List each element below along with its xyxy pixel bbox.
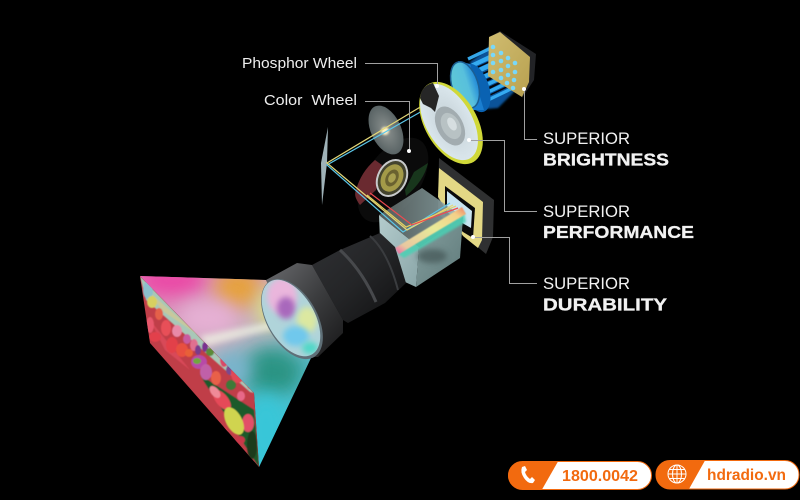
website badge	[656, 460, 799, 489]
folding mirror	[321, 127, 328, 205]
label: Phosphor Wheel: Phosphor Wheel	[242, 56, 357, 72]
color wheel	[343, 125, 443, 235]
lens glass	[261, 279, 323, 360]
projection screen with tulip photo	[140, 276, 259, 467]
callout: superior durability	[543, 274, 667, 314]
website badge: hdradio.vn	[707, 467, 786, 484]
LED array and collimator	[445, 31, 536, 116]
coloured light rays	[327, 106, 458, 232]
callout: superior brightness	[543, 129, 669, 170]
phosphor wheel	[406, 71, 496, 175]
callout: superior durability: DURABILITY	[543, 294, 667, 314]
callout: superior brightness: SUPERIOR	[543, 129, 630, 148]
icon: globe	[668, 465, 686, 483]
phone badge: 1800.0042	[562, 468, 638, 485]
DMD chip	[438, 158, 494, 254]
condenser lens	[361, 100, 411, 160]
prism cube	[379, 188, 463, 287]
icon: phone	[521, 466, 535, 483]
prism rainbow light path	[395, 207, 466, 258]
callout: superior performance	[543, 202, 694, 242]
callout: superior durability: SUPERIOR	[543, 274, 630, 293]
LED module back	[490, 31, 536, 98]
projected light beam	[138, 264, 311, 468]
callout: superior brightness: BRIGHTNESS	[543, 150, 669, 170]
callout dots	[407, 84, 526, 239]
callout: superior performance: PERFORMANCE	[543, 222, 694, 242]
leader lines	[365, 64, 537, 284]
LED module face	[488, 32, 530, 97]
callout: superior performance: SUPERIOR	[543, 202, 630, 221]
lens barrel	[266, 233, 406, 357]
projector exploded diagram infographic	[140, 31, 800, 490]
label: Color Wheel: Color Wheel	[264, 93, 357, 109]
phone badge	[508, 462, 652, 490]
